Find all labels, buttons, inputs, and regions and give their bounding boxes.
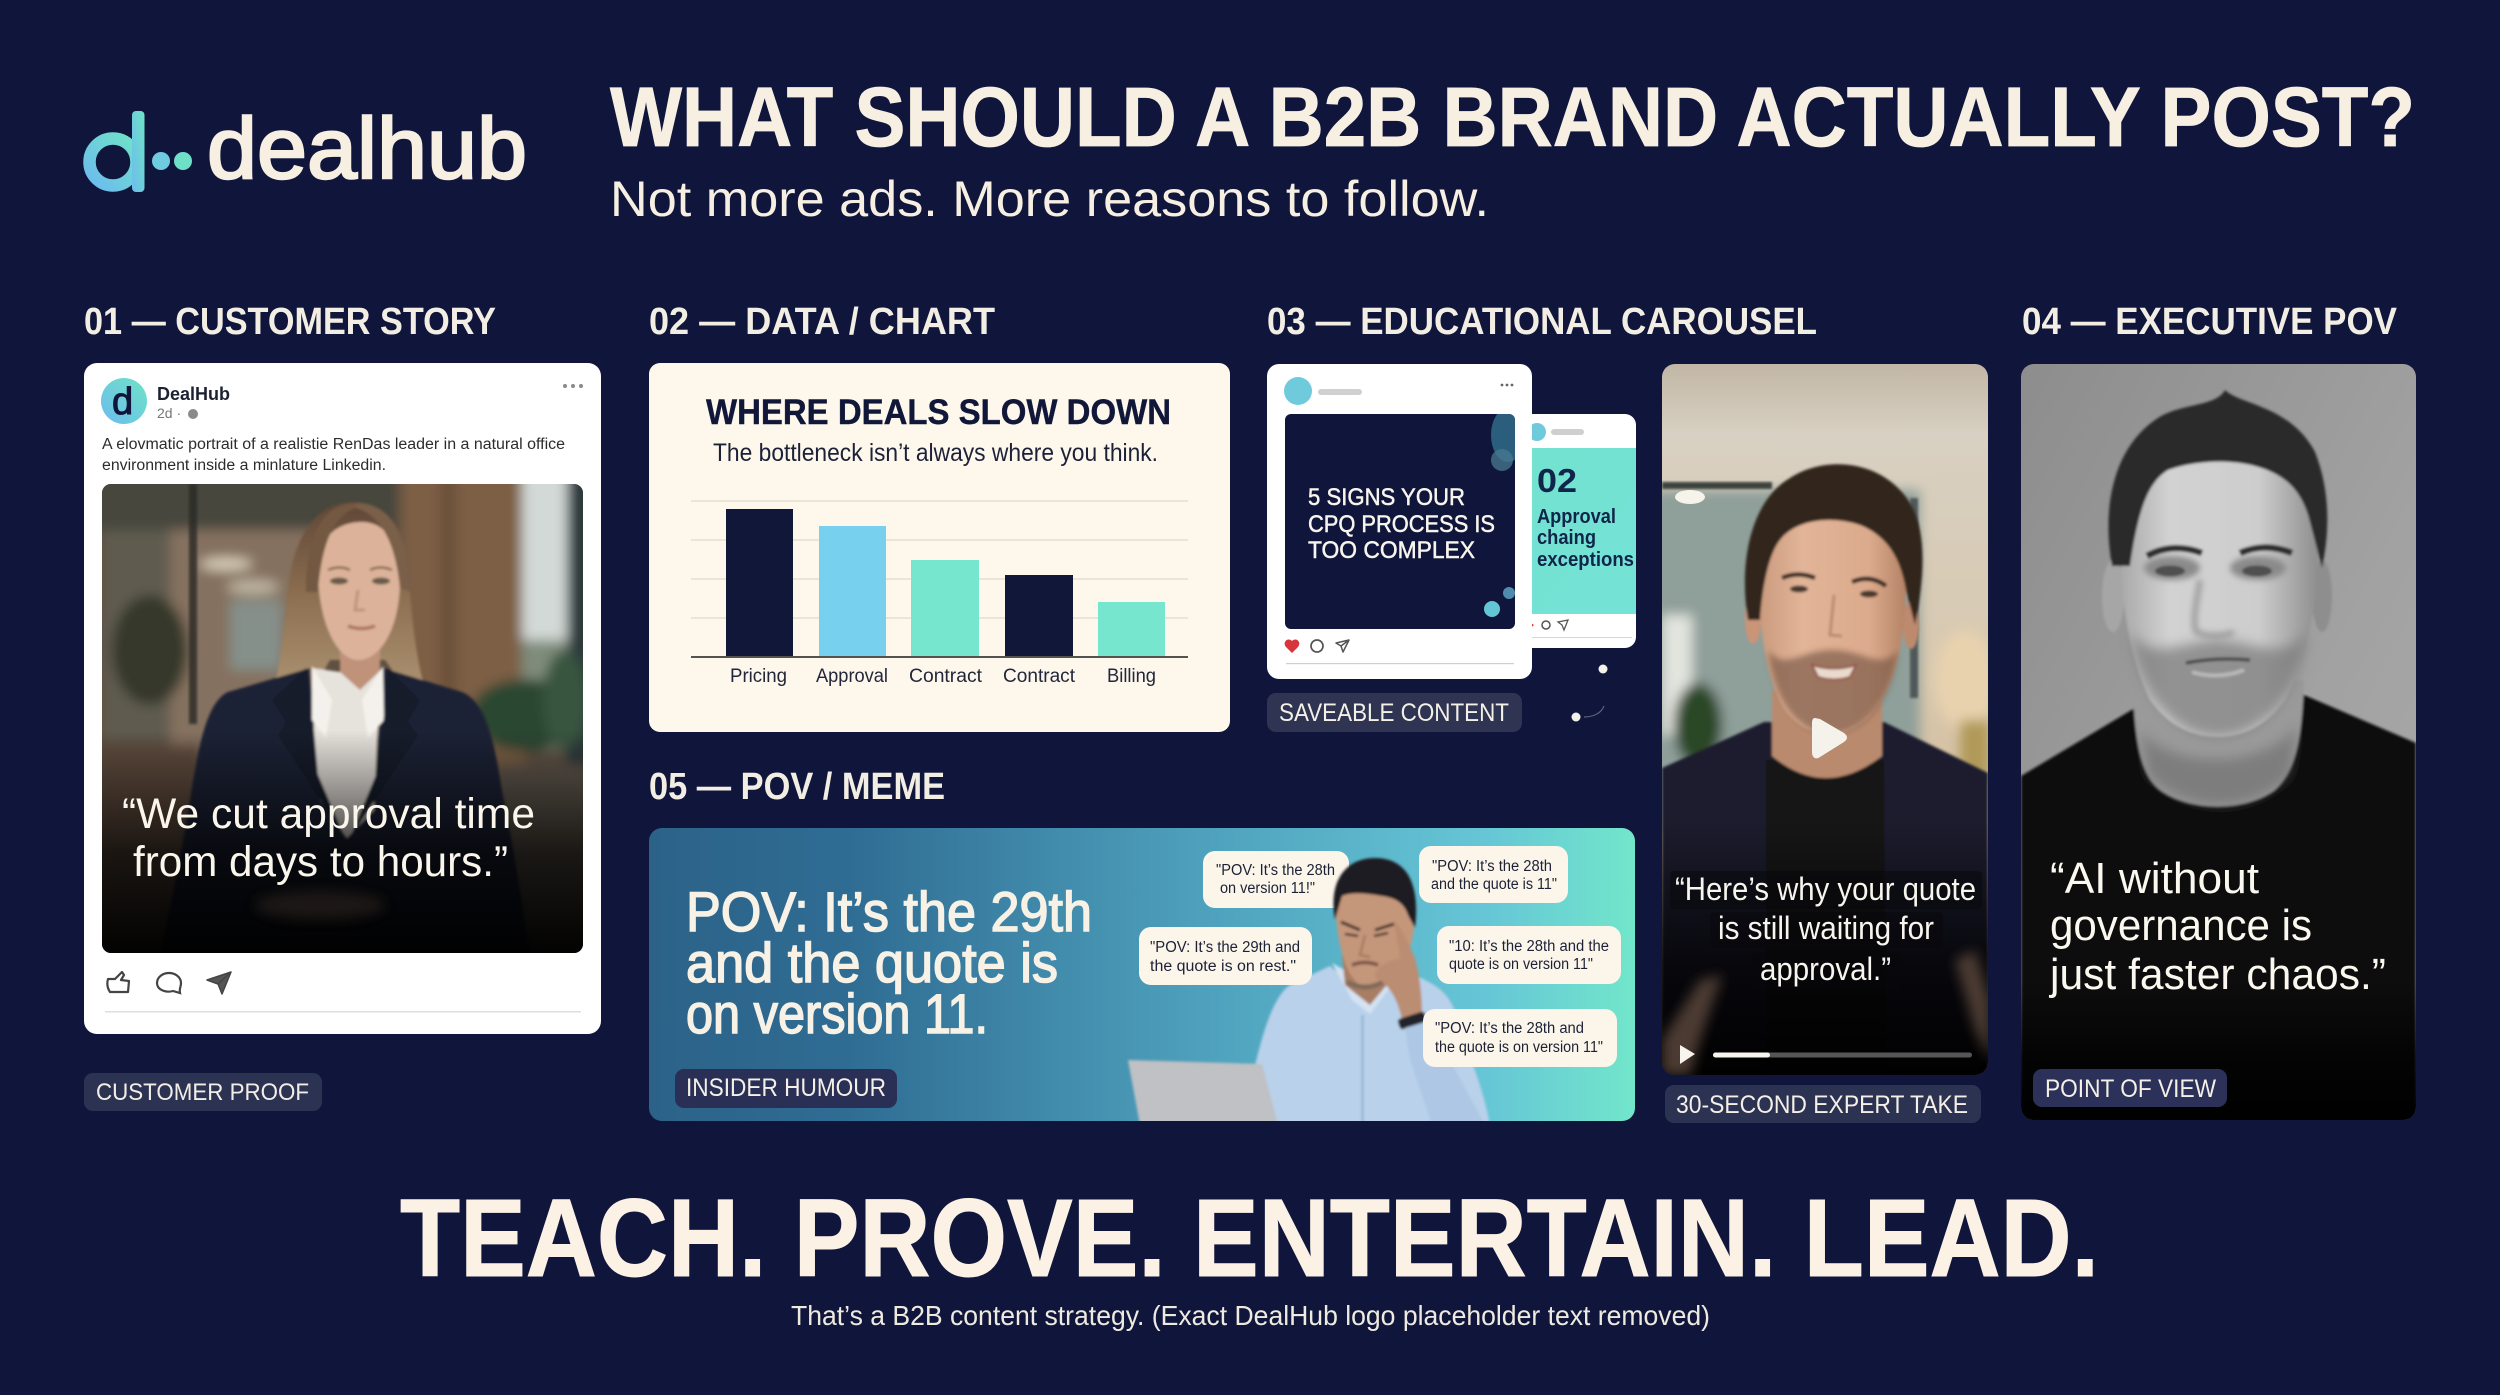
speech bubble 2: "POV: It’s the 28th — [1432, 858, 1552, 875]
bar chart: Contract — [909, 666, 983, 687]
panel: expert video — [1650, 364, 1995, 1075]
bar chart: Contract — [1003, 666, 1076, 687]
executive quote: just faster chaos.” — [2048, 950, 2386, 999]
tag: 30-second expert take: 30-SECOND EXPERT TAKE — [1676, 1091, 1968, 1119]
bar chart: Billing — [1107, 666, 1156, 687]
speech bubble 3: "POV: It’s the 29th and — [1150, 939, 1300, 956]
video dark fade — [1662, 820, 1988, 1075]
speech bubble 5: the quote is on version 11" — [1435, 1039, 1603, 1056]
bar chart — [691, 501, 1188, 687]
man hair — [1333, 858, 1416, 928]
carousel cover slide: CPQ PROCESS IS — [1308, 511, 1495, 538]
chart title: WHERE DEALS SLOW DOWN — [706, 393, 1171, 432]
man shirt — [1243, 966, 1490, 1125]
tag: insider humour — [675, 1069, 897, 1108]
logo wordmark: dealhub — [207, 101, 527, 197]
slide text: chaing — [1537, 527, 1596, 549]
subtitle: Not more ads. More reasons to follow. — [610, 171, 1489, 227]
speech bubble 3: the quote is on rest." — [1150, 958, 1296, 975]
exec ears — [2102, 560, 2124, 632]
post author: DealHub — [157, 384, 230, 404]
woman features — [330, 578, 348, 584]
exec features — [2147, 548, 2202, 556]
exec face — [2120, 445, 2318, 737]
tag: point of view — [2033, 1069, 2227, 1107]
post avatar: d — [112, 381, 133, 423]
panel: pov meme banner — [649, 828, 1635, 1125]
man blazer — [1662, 722, 1988, 1075]
tag: 30-second expert take — [1665, 1085, 1981, 1123]
tag: insider humour: INSIDER HUMOUR — [686, 1074, 886, 1102]
woman hair back — [274, 502, 425, 685]
slide number: 02 — [1537, 462, 1577, 499]
speech bubble 5: "POV: It’s the 28th and — [1435, 1020, 1584, 1037]
man features — [1341, 922, 1360, 930]
exec eye sockets — [2144, 556, 2286, 580]
video caption — [1675, 871, 1976, 987]
caption backdrops — [1670, 871, 1982, 908]
speech bubble 3 — [1139, 927, 1312, 985]
icon: logo d mark and dots — [90, 111, 192, 192]
panel: executive pov — [2021, 364, 2416, 1120]
slide text: exceptions — [1537, 549, 1634, 571]
speech bubble 5 — [1423, 1009, 1617, 1067]
woman face — [318, 522, 400, 660]
icon: like — [107, 972, 129, 992]
man face — [1334, 891, 1416, 986]
chart card — [649, 363, 1230, 732]
dealhub logo — [90, 101, 527, 197]
meme headline — [686, 880, 1092, 1045]
icon: heart — [1285, 640, 1299, 653]
video caption: “Here’s why your quote — [1675, 871, 1976, 907]
banner background — [649, 828, 1635, 1121]
man features — [1782, 574, 1815, 578]
speech bubble 2 — [1419, 846, 1568, 903]
video caption: is still waiting for — [1718, 910, 1934, 946]
tag: point of view: POINT OF VIEW — [2045, 1075, 2216, 1103]
executive figure — [2021, 390, 2416, 1120]
speech bubble 4 — [1437, 926, 1621, 984]
tag: saveable content: SAVEABLE CONTENT — [1279, 699, 1509, 727]
tag: customer proof — [84, 1073, 322, 1111]
photo dark fade — [102, 730, 583, 953]
video presenter — [1662, 464, 1988, 1075]
post time — [157, 405, 198, 421]
carousel card 1 — [1267, 364, 1532, 679]
slide text: Approval — [1537, 506, 1616, 528]
footer caption: That’s a B2B content strategy. (Exact DealHub logo placeholder text removed) — [791, 1300, 1710, 1331]
panel: educational carousel — [1267, 364, 1636, 722]
man hands — [1662, 950, 1990, 1075]
woman collar — [312, 666, 384, 738]
exec neck — [2133, 680, 2304, 806]
man tee — [1766, 760, 1885, 949]
heading: 01 customer story: 01 — CUSTOMER STORY — [84, 301, 496, 343]
speech bubble 1: "POV: It’s the 28th — [1216, 862, 1335, 879]
carousel cover slide: 5 SIGNS YOUR — [1308, 484, 1465, 511]
tagline: TEACH. PROVE. ENTERTAIN. LEAD. — [400, 1177, 2099, 1300]
video player controls — [1680, 1045, 1972, 1064]
man ears — [1745, 596, 1761, 644]
video caption: approval.” — [1760, 951, 1891, 987]
heading: 05 pov meme: 05 — POV / MEME — [649, 766, 945, 808]
bar chart: Pricing — [730, 666, 787, 687]
executive quote: governance is — [2050, 901, 2312, 950]
portrait dark fade — [2021, 980, 2416, 1120]
post caption — [102, 436, 565, 474]
carousel cover slide: TOO COMPLEX — [1308, 537, 1475, 564]
heading: 03 educational carousel: 03 — EDUCATIONAL CAROUSEL — [1267, 301, 1817, 343]
carousel card 2 — [1532, 414, 1636, 648]
executive quote: “AI without — [2050, 854, 2259, 903]
customer quote: from days to hours.” — [133, 838, 508, 886]
post menu dots — [563, 384, 583, 388]
icon: comment — [157, 973, 181, 993]
customer quote: “We cut approval time — [122, 790, 535, 838]
tag: saveable content — [1267, 693, 1522, 732]
frustrated man with laptop — [1128, 858, 1490, 1125]
carousel cover slide — [1285, 408, 1525, 629]
icon: comment — [1311, 640, 1323, 652]
meme headline: and the quote is — [686, 931, 1058, 994]
speech bubble 1 — [1203, 851, 1349, 908]
video frame — [1650, 364, 1995, 1075]
woman figure — [171, 501, 522, 917]
heading: 02 data chart: 02 — DATA / CHART — [649, 301, 995, 343]
post divider — [105, 1011, 581, 1012]
woman neck — [338, 650, 382, 691]
man hair — [1745, 464, 1923, 625]
tag: customer proof: CUSTOMER PROOF — [96, 1079, 309, 1106]
man beard — [1768, 650, 1898, 734]
bar chart: Approval — [816, 666, 888, 687]
heading: 04 executive pov: 04 — EXECUTIVE POV — [2022, 301, 2398, 343]
post time: 2d · — [157, 405, 181, 421]
post avatar — [101, 378, 147, 424]
woman hair front — [306, 503, 356, 592]
post caption: A elovmatic portrait of a realistie RenDas leader in a natural office — [102, 436, 565, 453]
exec stubble — [2130, 630, 2308, 737]
meme headline: POV: It’s the 29th — [686, 880, 1092, 943]
exec hair — [2108, 390, 2327, 568]
panel: customer story linkedin post — [84, 363, 601, 1034]
speech bubble 1: on version 11!" — [1220, 880, 1315, 897]
speech bubble 4: quote is on version 11" — [1449, 956, 1593, 973]
customer quote — [122, 790, 535, 886]
speech bubble 4: "10: It’s the 28th and the — [1449, 938, 1609, 955]
man neck — [1340, 954, 1388, 1006]
icon: send — [1336, 640, 1349, 652]
panel: data chart — [649, 363, 1230, 732]
executive quote — [2048, 854, 2386, 999]
post card — [84, 363, 601, 1034]
decorative dots and curve — [1572, 664, 1608, 722]
meme headline: on version 11. — [686, 982, 988, 1045]
post photo: woman in office — [90, 470, 592, 953]
woman lapels — [274, 668, 342, 830]
black and white portrait — [2021, 364, 2416, 1120]
post caption: environment inside a minlature Linkedin. — [102, 457, 386, 474]
man neck — [1772, 690, 1882, 778]
icon: large play — [1812, 718, 1847, 758]
woman blazer — [171, 667, 522, 917]
exec tee — [2021, 692, 2416, 1120]
laptop — [1128, 1060, 1278, 1125]
chart subtitle: The bottleneck isn’t always where you think. — [713, 439, 1158, 467]
icon: send — [207, 972, 231, 994]
woman shirt — [312, 668, 383, 838]
man face — [1758, 505, 1906, 734]
speech bubble 2: and the quote is 11" — [1431, 876, 1557, 893]
slide text — [1537, 506, 1634, 571]
man hand and arm — [1375, 922, 1422, 1020]
